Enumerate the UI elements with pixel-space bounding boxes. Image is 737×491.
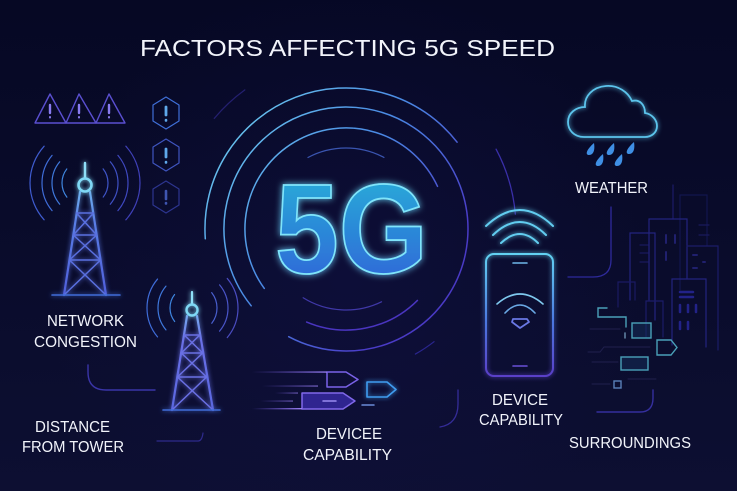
- phone details: [497, 263, 543, 366]
- label: network congestion: [34, 313, 137, 351]
- icon: warning triangles: [35, 94, 125, 123]
- 5G emblem: 5G: [275, 158, 428, 300]
- box 2: [621, 357, 648, 370]
- connector: left curve: [88, 365, 155, 390]
- label: device capability (phone): CAPABILITY: [479, 412, 563, 429]
- icon: smartphone with wifi: [486, 210, 553, 376]
- connector: faint trace: [157, 433, 203, 441]
- label: devicee capability: CAPABILITY: [303, 447, 392, 464]
- rain drops: [587, 142, 634, 166]
- central 5G rings: [104, 0, 588, 471]
- signal waves: [7, 105, 163, 261]
- connector: arrows to phone: [440, 390, 458, 427]
- icon: weather cloud with rain: [568, 86, 657, 166]
- label: distance from tower: DISTANCE: [35, 419, 110, 436]
- tower: distance from tower: [127, 243, 257, 410]
- icon: alert hexagons: [153, 97, 179, 213]
- signal waves: [127, 243, 257, 373]
- tag: [657, 340, 677, 355]
- label: devicee capability: [303, 426, 392, 464]
- label: network congestion: NETWORK: [47, 313, 125, 330]
- label: network congestion: CONGESTION: [34, 334, 137, 351]
- wifi above phone: [486, 210, 553, 243]
- box 1: [632, 323, 651, 338]
- mast: [52, 163, 120, 295]
- icon: city skyline: [618, 185, 718, 350]
- label: surroundings: SURROUNDINGS: [569, 435, 691, 452]
- tower: network congestion: [7, 105, 163, 295]
- phone body: [486, 254, 553, 376]
- label: devicee capability: DEVICEE: [316, 426, 382, 443]
- blue arrow: [367, 382, 396, 397]
- title: FACTORS AFFECTING 5G SPEED: [140, 35, 555, 61]
- surroundings diagram: [588, 308, 677, 412]
- label: device capability (phone): [479, 392, 563, 429]
- speed lines: [252, 371, 374, 409]
- mast: [163, 292, 220, 410]
- faint traces: [588, 329, 656, 384]
- label: device capability (phone): DEVICE: [492, 392, 548, 409]
- label: weather: WEATHER: [575, 180, 648, 197]
- icon: speed arrows: [252, 371, 396, 409]
- small square: [614, 381, 621, 388]
- lower filled arrow: [302, 393, 355, 409]
- cloud: [568, 86, 657, 137]
- connector: weather to city: [568, 207, 611, 277]
- upper arrow: [327, 372, 358, 387]
- label: distance from tower: FROM TOWER: [22, 439, 124, 456]
- curved connector: [597, 390, 653, 412]
- label: distance from tower: [22, 419, 124, 456]
- circuit hook: [598, 308, 626, 327]
